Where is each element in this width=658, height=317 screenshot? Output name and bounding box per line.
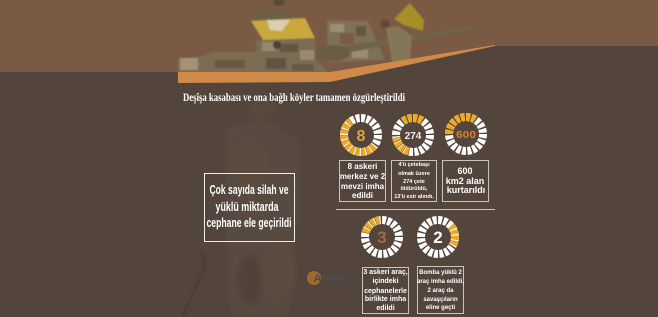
stat ring: 8: 8 <box>357 128 366 145</box>
callout: weapons seized: Çok sayıda silah ve <box>210 182 288 197</box>
stat box: 3 military vehicles <box>362 268 408 314</box>
banner detail <box>267 20 290 31</box>
stat box: bomb-loaded vehicles <box>417 266 464 314</box>
tank turret <box>256 38 330 73</box>
stat box: 274 killed: 274 çete <box>403 179 425 185</box>
stat box: 8 military positions: merkez ve 2 <box>340 172 386 181</box>
stat box: 8 military positions: edildi <box>352 191 373 200</box>
fighter on the tank <box>250 7 296 22</box>
divider <box>336 208 495 210</box>
stat box: 8 military positions: mevzi imha <box>341 182 385 191</box>
stat ring: 2: 2 <box>433 228 443 247</box>
background: upper brown band <box>0 0 658 72</box>
logo: AHHA: AHHA <box>314 273 347 285</box>
stat ring: 274: 274 <box>405 131 422 142</box>
stat box: 274 killed: öldürüldü, <box>401 186 428 192</box>
title: Deşîşa kasabası ve ona bağlı köyler tamamen özgürleştirildi <box>183 90 405 104</box>
stat box: bomb-loaded vehicles: savaşçıların <box>423 297 458 303</box>
standing fighter <box>386 26 412 62</box>
standing fighter head <box>380 20 390 28</box>
stat box: 274 killed: 13'ü esir alındı. <box>394 194 434 200</box>
stat box: bomb-loaded vehicles: eline geçti <box>426 305 456 311</box>
orange angled strip <box>178 45 495 83</box>
stat box: 274 killed: olmak üzere <box>398 171 430 177</box>
yellow flag <box>394 3 424 31</box>
panel camouflage <box>330 24 368 58</box>
stat box: 3 military vehicles: edildi <box>376 305 395 312</box>
gun mantlet <box>316 45 350 61</box>
stat box: bomb-loaded vehicles: Bomba yüklü 2 <box>419 270 462 276</box>
stat ring: 600: 600 <box>456 130 477 141</box>
stat box: 600 km2: kurtarıldı <box>447 185 485 195</box>
stat box: 600 km2 <box>442 160 488 202</box>
stat box: 3 military vehicles: cephanelerle <box>364 288 407 295</box>
tank deck highlight <box>180 58 198 70</box>
stat box: 8 military positions: 8 askeri <box>348 162 377 171</box>
background: soldier silhouette <box>225 99 298 317</box>
tank photo with fighters and flags <box>178 0 473 73</box>
fighter head <box>273 0 285 6</box>
yellow banner <box>251 18 315 40</box>
stat ring: 2 <box>414 213 462 261</box>
turret panel opening <box>340 33 354 44</box>
tank rear deck <box>178 52 260 73</box>
stat ring: 8 <box>337 111 385 159</box>
stat box: 3 military vehicles: 3 askeri araç, <box>363 269 408 276</box>
stat box: 3 military vehicles: birlikte imha <box>365 296 406 303</box>
stat ring: 600 <box>449 117 483 151</box>
stat box: bomb-loaded vehicles: 2 araç da <box>427 288 454 294</box>
gun barrel <box>316 26 473 58</box>
stat box: 600 km2: km2 alan <box>446 176 484 186</box>
stat box: 274 killed <box>392 160 436 202</box>
stat ring: 3 <box>361 216 403 258</box>
logo: AHHA <box>307 271 347 285</box>
stat box: 3 military vehicles: içindeki <box>372 278 399 285</box>
stat ring: 3: 3 <box>377 228 387 247</box>
callout: weapons seized <box>204 174 294 242</box>
stat box: 8 military positions <box>340 160 386 202</box>
stat box: bomb-loaded vehicles: araç imha edildi, <box>417 279 464 285</box>
tank camouflage <box>215 41 314 71</box>
stat box: 600 km2: 600 <box>457 166 473 176</box>
stat ring: 274 <box>389 111 437 159</box>
callout: weapons seized: cephane ele geçirildi <box>206 215 292 230</box>
rear turret panel <box>327 20 385 62</box>
stat box: 274 killed: 4'ü çetebaşı <box>398 162 430 168</box>
callout: weapons seized: yüklü miktarda <box>216 199 279 214</box>
soldier rifle <box>182 252 205 317</box>
